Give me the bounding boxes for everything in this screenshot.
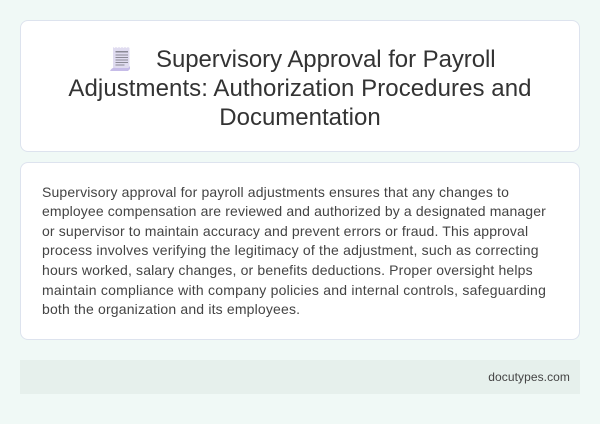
icon: payroll document — [110, 47, 130, 71]
body text: process involves verifying the legitimacy of the adjustment, such as correcting — [42, 242, 539, 258]
body text: maintain compliance with company policies and internal controls, safeguarding — [42, 282, 546, 298]
heading — [68, 46, 532, 131]
body text — [42, 184, 546, 317]
body text: employee compensation are reviewed and authorized by a designated manager — [42, 203, 546, 219]
footer source text: docutypes.com — [488, 370, 570, 384]
body text: Supervisory approval for payroll adjustments ensures that any changes to — [42, 184, 509, 200]
body text: or supervisor to maintain accuracy and prevent errors or fraud. This approval — [42, 223, 528, 239]
body text: both the organization and its employees. — [42, 301, 300, 317]
panel: description — [20, 162, 580, 340]
footer bar — [20, 360, 580, 394]
panel: title card — [20, 20, 580, 152]
body text: hours worked, salary changes, or benefits deductions. Proper oversight helps — [42, 262, 533, 278]
heading: Supervisory Approval for Payroll — [156, 46, 496, 73]
heading: Adjustments: Authorization Procedures and — [68, 75, 532, 102]
heading: Documentation — [219, 104, 381, 131]
